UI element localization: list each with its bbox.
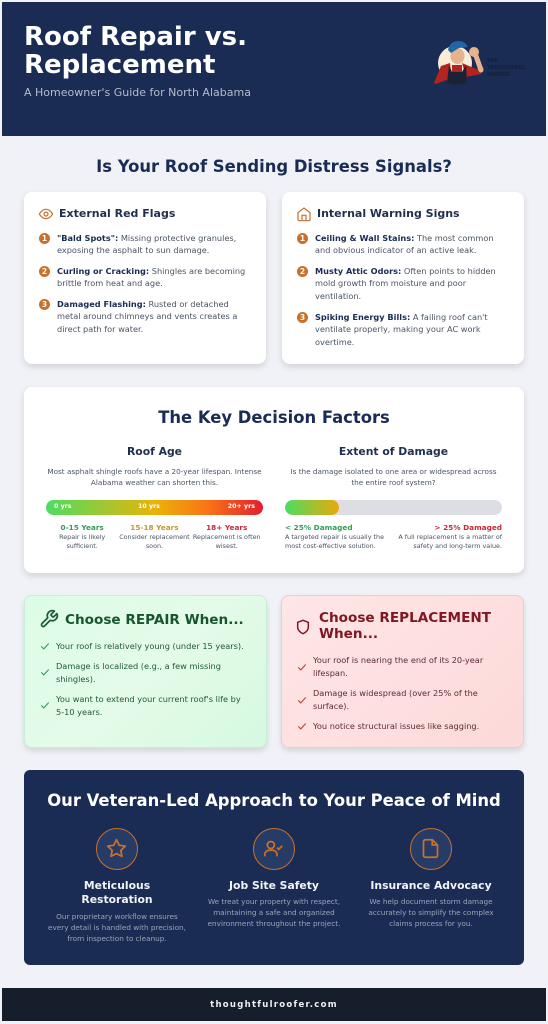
age gradient bar: 20+ yrs	[228, 503, 255, 510]
check item 2	[298, 688, 478, 711]
column text: Our proprietary workflow ensures	[56, 912, 178, 921]
list item 2: Curling or Cracking: Shingles are becoming	[57, 266, 245, 276]
column title: Meticulous	[84, 878, 150, 892]
roof age description: Most asphalt shingle roofs have a 20-year lifespan. Intense	[47, 466, 262, 476]
heading: Our Veteran-Led Approach to Your Peace of Mind	[47, 791, 501, 810]
heading: Choose REPLACEMENT	[319, 610, 491, 626]
damage description: the entire roof system?	[351, 478, 436, 486]
panel: key decision factors	[24, 387, 524, 573]
list item 2: mold growth from moisture and poor	[315, 278, 466, 288]
list item 3	[39, 299, 237, 334]
panel: choose repair	[24, 595, 267, 748]
list item 1: 1	[300, 234, 305, 243]
column title	[81, 878, 153, 906]
over 25 percent: > 25% Damaged	[434, 522, 502, 532]
column text	[48, 912, 186, 943]
age range: 15-18: Consider replacement	[119, 532, 190, 540]
check item 2: shingles).	[56, 674, 96, 684]
list item 1: 1	[42, 234, 47, 243]
column text: environment throughout the project.	[208, 919, 340, 928]
check item 3: You want to extend your current roof's life by	[56, 694, 241, 704]
damage heading: Extent of Damage	[339, 445, 448, 458]
check item 3: 5-10 years.	[56, 707, 102, 717]
panel: veteran-led approach	[24, 770, 524, 965]
title	[24, 22, 247, 80]
check item 3: You notice structural issues like sagging.	[313, 721, 479, 731]
age range: 18+	[193, 522, 261, 550]
logo: roofer mascot: ROOFER	[487, 72, 510, 78]
column text: We treat your property with respect,	[208, 897, 340, 906]
column title: Restoration	[81, 893, 153, 906]
check item 1	[298, 655, 484, 678]
check item 2: Damage is widespread (over 25% of the	[313, 688, 478, 698]
over 25 percent: A full replacement is a matter of	[398, 532, 502, 540]
age range: 0-15: sufficient.	[66, 542, 98, 550]
under 25 percent: most cost-effective solution.	[285, 542, 376, 550]
list item 3	[297, 312, 488, 347]
roof age heading: Roof Age	[127, 445, 182, 458]
column text: accurately to simplify the complex	[368, 908, 494, 917]
column text: from inspection to cleanup.	[67, 934, 167, 943]
age range: 0-15: 0-15 Years	[61, 522, 104, 532]
age gradient bar	[46, 500, 263, 514]
heading: When...	[319, 626, 378, 642]
check item 2	[40, 661, 221, 684]
checklist	[40, 641, 244, 717]
list item 1: exposing the asphalt to sun damage.	[57, 245, 209, 255]
list item 2: Musty Attic Odors: Often points to hidden	[315, 266, 496, 276]
list item 1: "Bald Spots": Missing protective granules,	[57, 233, 236, 243]
check item 1: Your roof is relatively young (under 15 years).	[56, 641, 244, 651]
extent of damage column	[285, 445, 502, 550]
roof age column	[46, 445, 263, 550]
list item 3: 3	[42, 300, 47, 309]
list item 1	[297, 233, 494, 255]
column: job site safety	[208, 828, 340, 928]
logo: roofer mascot	[434, 41, 526, 84]
age range: 15-18: soon.	[146, 542, 163, 550]
check item 1: lifespan.	[313, 668, 348, 678]
list item 2	[39, 266, 245, 288]
age gradient bar: 10 yrs	[138, 503, 160, 510]
icon: document	[410, 828, 452, 870]
check item 3	[40, 694, 241, 717]
title: Roof Repair vs.	[24, 22, 247, 52]
damage bar	[285, 500, 502, 514]
icon: eye	[38, 208, 54, 220]
check item 1: Your roof is nearing the end of its 20-year	[313, 655, 483, 665]
list item 3: overtime.	[315, 337, 354, 347]
list item 2: brittle from heat and age.	[57, 278, 163, 288]
panel: internal warning signs	[282, 192, 524, 364]
list item 3: ventilate properly, making your AC work	[315, 324, 481, 334]
check item 2: Damage is localized (e.g., a few missing	[56, 661, 221, 671]
over 25 percent	[398, 522, 502, 550]
column text	[368, 897, 494, 928]
column: insurance advocacy	[368, 828, 494, 928]
age range: 18+: Replacement is often	[193, 532, 261, 540]
list item 3: direct path for water.	[57, 324, 143, 334]
age range: 18+: 18+ Years	[206, 522, 247, 532]
list item 3: Spiking Energy Bills: A failing roof can't	[315, 312, 488, 322]
checklist	[298, 655, 484, 731]
list item 1: and obvious indicator of an active leak.	[315, 245, 477, 255]
list item 2	[297, 266, 496, 301]
age range: 18+: wisest.	[216, 542, 238, 550]
column text	[208, 897, 340, 928]
icon: user check	[253, 828, 295, 870]
column text: maintaining a safe and organized	[213, 908, 335, 917]
age gradient bar: 0 yrs	[54, 503, 72, 510]
heading	[319, 610, 491, 642]
subtitle: A Homeowner's Guide for North Alabama	[24, 86, 251, 99]
heading: Internal Warning Signs	[317, 207, 460, 220]
icon: star	[96, 828, 138, 870]
column title: Job Site Safety	[229, 878, 319, 892]
panel: choose replacement	[281, 595, 524, 748]
check item 2: surface).	[313, 701, 349, 711]
damage description	[290, 466, 497, 486]
title: Replacement	[24, 50, 215, 80]
column text: claims process for you.	[389, 919, 473, 928]
list item 3: Damaged Flashing: Rusted or detached	[57, 299, 229, 309]
roof age description: Alabama weather can shorten this.	[91, 478, 218, 486]
age range: 0-15	[59, 522, 105, 550]
under 25 percent: A targeted repair is usually the	[285, 532, 384, 540]
list item 2: 2	[300, 267, 305, 276]
age range: 15-18	[119, 522, 190, 550]
list item 2: 2	[42, 267, 47, 276]
list item 3: 3	[300, 313, 305, 322]
heading: External Red Flags	[59, 207, 175, 220]
column text: We help document storm damage	[369, 897, 493, 906]
icon: house	[297, 207, 311, 222]
age range: 0-15: Repair is likely	[59, 532, 105, 540]
header banner	[2, 2, 546, 136]
column title: Insurance Advocacy	[370, 878, 492, 892]
heading: The Key Decision Factors	[158, 408, 390, 426]
column text: every detail is handled with precision,	[48, 923, 186, 932]
footer bar	[2, 988, 546, 1021]
list item 1	[39, 233, 236, 255]
logo: roofer mascot: THOUGHTFUL	[487, 65, 526, 71]
heading: Choose REPAIR When...	[65, 612, 244, 628]
damage description: Is the damage isolated to one area or widespread across	[290, 466, 497, 476]
list item 1: Ceiling & Wall Stains: The most common	[315, 233, 494, 243]
under 25 percent	[285, 522, 384, 550]
over 25 percent: safety and long-term value.	[413, 542, 502, 550]
roof age description	[47, 466, 262, 486]
column: meticulous restoration	[48, 828, 186, 943]
section heading: distress signals: Is Your Roof Sending Distress Signals?	[96, 157, 452, 176]
age range: 15-18: 15-18 Years	[130, 522, 179, 532]
list item 3: metal around chimneys and vents creates a	[57, 311, 237, 321]
under 25 percent: < 25% Damaged	[285, 522, 353, 532]
icon: wrench	[40, 610, 58, 628]
panel: external red flags	[24, 192, 266, 364]
list item 2: ventilation.	[315, 291, 361, 301]
footer url: thoughtfulroofer.com	[210, 1000, 338, 1010]
logo: roofer mascot: THE	[487, 58, 499, 64]
icon: shield	[296, 620, 310, 634]
